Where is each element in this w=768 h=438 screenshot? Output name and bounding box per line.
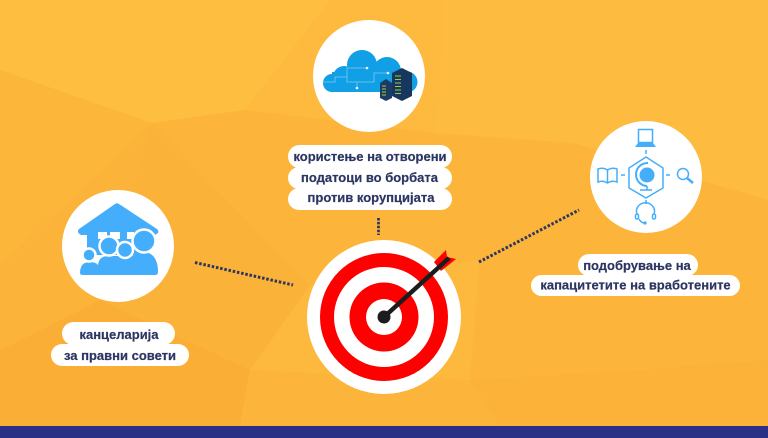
label: staff capacity: капацитетите на вработените [540,278,731,292]
chart: target with arrow [307,240,461,394]
panel: staff capacity [531,121,740,296]
label: open data: користење на отворени [293,149,447,164]
label: legal advice office [51,322,189,366]
dotted connector: right [479,210,579,262]
dotted connector: left [195,262,293,285]
label: staff capacity: подобрување на [583,258,692,273]
label: staff capacity [531,254,740,296]
icon: house with people [62,190,174,302]
icon: arrow [378,250,456,324]
icon: globe network [590,121,702,233]
label: open data [288,145,452,210]
dotted connector: top [377,218,380,235]
label: legal advice office: за правни совети [64,348,176,363]
label: open data: податоци во борбата [301,170,439,185]
label: legal advice office: канцеларија [79,327,159,342]
label: open data: против корупцијата [308,190,435,205]
panel: legal advice office [51,190,189,366]
footer bar [0,426,768,438]
icon: cloud and servers [313,20,425,132]
panel: open data [288,20,452,210]
